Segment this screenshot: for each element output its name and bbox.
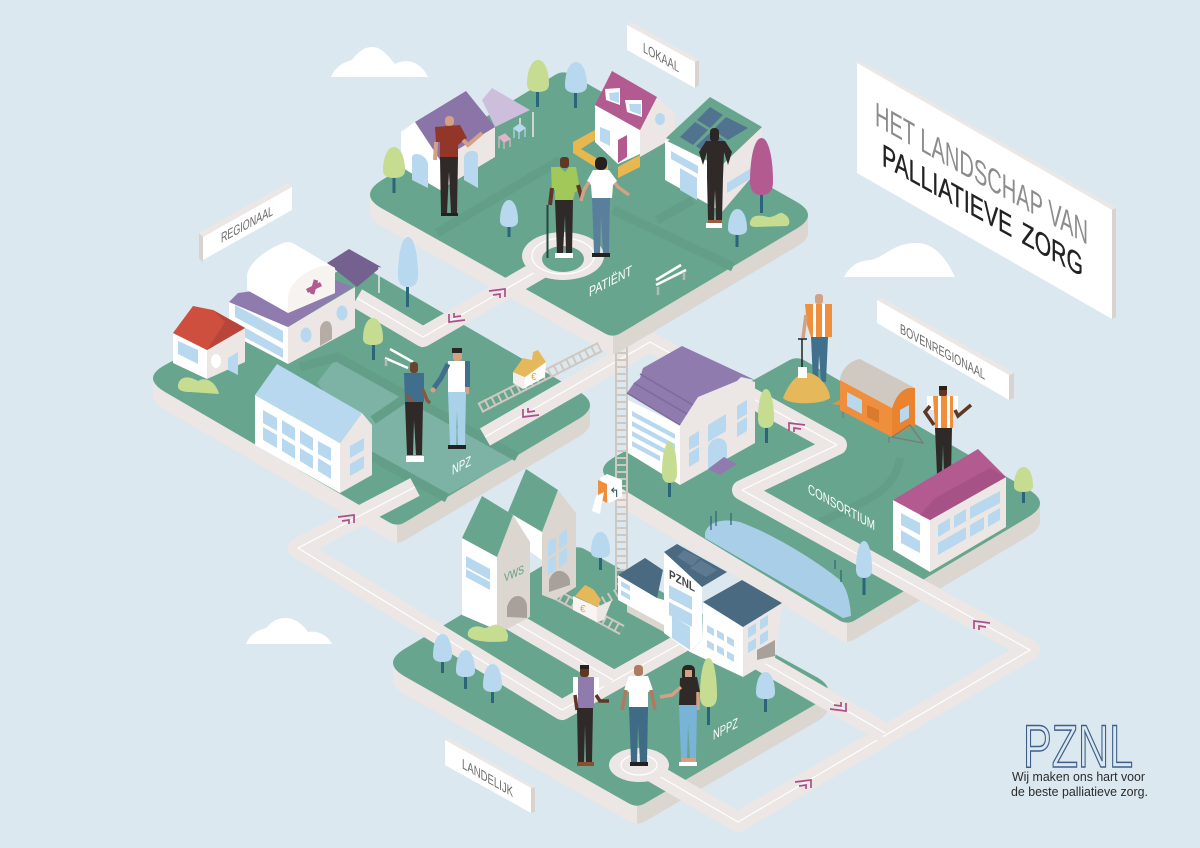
cloud: right	[844, 243, 955, 277]
person: man white and blue	[430, 348, 470, 449]
steps	[708, 457, 737, 475]
trees: row of three	[433, 634, 502, 703]
hospital	[229, 242, 381, 364]
title sign	[857, 61, 1116, 319]
tree	[1014, 467, 1033, 503]
label: consortium: CONSORTIUM	[808, 481, 875, 534]
house: solar roof	[665, 97, 762, 212]
sign: landelijk	[445, 738, 535, 813]
tree	[728, 209, 747, 247]
cloud: top left	[331, 47, 428, 77]
rail track: regional	[478, 343, 602, 412]
roundabout: patient	[522, 232, 604, 280]
road network: lower roads	[298, 342, 1030, 822]
ground bands	[437, 160, 560, 233]
logo: pznl: PZNL	[1023, 713, 1133, 780]
label: vws: VWS	[504, 563, 524, 585]
tree	[398, 237, 418, 307]
tree	[662, 442, 677, 497]
tree	[383, 147, 405, 193]
sign: lokaal	[627, 22, 699, 88]
pznl building	[618, 544, 782, 677]
tree	[700, 658, 717, 725]
tree	[758, 389, 774, 443]
person: worker in vest	[925, 386, 971, 475]
magenta building	[893, 449, 1006, 572]
platforms: landelijk, regionaal, bovenregionaal	[153, 264, 1040, 824]
cloud: lower left	[246, 618, 332, 644]
ground path: consortium	[820, 458, 900, 522]
logo: pznl	[1011, 713, 1148, 799]
signpost: ↰	[609, 485, 620, 500]
person: woman white shirt	[581, 157, 629, 257]
panel: bovenregionaal objects	[627, 294, 1033, 618]
vws building	[462, 469, 576, 630]
bench	[385, 349, 413, 368]
tree: magenta	[750, 138, 773, 213]
platform: bovenregionaal	[603, 358, 1040, 642]
sign: landelijk: LANDELIJK	[462, 756, 513, 801]
tree	[500, 200, 518, 237]
plaza: regional light area	[300, 357, 517, 498]
tagline	[1011, 770, 1148, 799]
tree	[363, 318, 383, 360]
sand pile	[783, 373, 830, 403]
platform: regionaal	[153, 264, 590, 543]
sign: regionaal	[199, 183, 292, 262]
tree	[527, 60, 549, 107]
panel: landelijk objects	[433, 469, 782, 782]
road: patient to regional	[357, 256, 563, 337]
bush	[750, 213, 789, 227]
bench	[656, 265, 686, 295]
bush	[178, 377, 219, 394]
person: woman black top	[660, 665, 700, 766]
bush	[468, 625, 508, 642]
tagline: Wij maken ons hart voor	[1012, 770, 1145, 784]
person: old man with cane	[548, 157, 582, 258]
money cart: landelijk: €	[580, 604, 586, 615]
platform: lokaal	[357, 72, 808, 354]
money cart: landelijk	[573, 585, 612, 622]
person: worker with shovel	[803, 294, 832, 382]
signpost	[592, 474, 622, 514]
tree	[756, 672, 775, 712]
sign: bovenregionaal: BOVENREGIONAAL	[900, 321, 985, 383]
chevrons: road direction arrows	[338, 289, 990, 789]
tree	[591, 532, 610, 570]
sign: bovenregionaal	[877, 297, 1014, 400]
money cart: regional	[513, 350, 546, 389]
label: nppz: NPPZ	[713, 716, 738, 744]
tagline: de beste palliatieve zorg.	[1011, 785, 1148, 799]
panel: regionaal objects	[173, 237, 602, 493]
tree	[565, 62, 587, 108]
shovel	[798, 339, 807, 378]
red house	[173, 306, 245, 379]
house: purple roof	[401, 91, 495, 190]
rail track: landelijk	[546, 586, 624, 634]
pergola with chairs	[482, 88, 533, 149]
sign: regionaal: REGIONAAL	[221, 203, 273, 247]
person: man in red shirt	[435, 116, 482, 216]
label: patient: PATIËNT	[589, 262, 632, 301]
sign: lokaal: LOKAAL	[643, 40, 679, 76]
person: man white shirt	[622, 665, 655, 766]
fence	[573, 130, 608, 175]
person: man purple vest	[573, 665, 609, 766]
person: woman blue top	[404, 362, 430, 462]
house: magenta roof	[573, 71, 675, 178]
long white building	[255, 364, 372, 493]
money cart: regional: €	[531, 372, 537, 383]
purple building	[627, 346, 755, 485]
label: npz: NPZ	[452, 454, 471, 479]
label: pznl: PZNL	[669, 567, 695, 595]
panel: lokaal objects	[383, 60, 789, 301]
ladder: rail between levels	[616, 345, 627, 590]
caravan	[832, 359, 923, 443]
title line 2: PALLIATIEVE ZORG	[882, 138, 1083, 284]
pond	[705, 511, 851, 618]
person: woman hands on hips	[699, 128, 732, 228]
tree	[856, 541, 872, 595]
roundabout: nppz	[609, 748, 669, 782]
platform: landelijk	[393, 547, 828, 824]
